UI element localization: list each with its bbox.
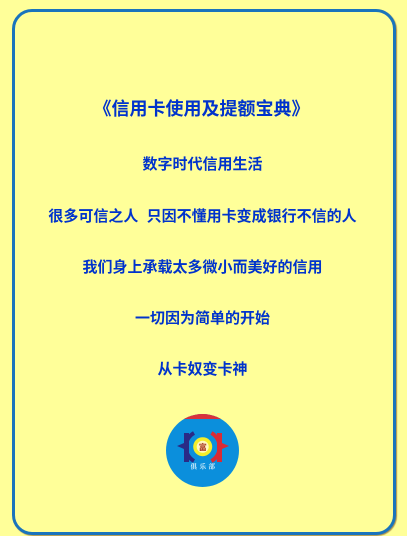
text line: from card slave to card master: 从卡奴变卡神 xyxy=(157,361,248,378)
title: 《信用卡使用及提额宝典》 xyxy=(94,99,310,119)
text line: simple start: 一切因为简单的开始 xyxy=(135,310,270,327)
icon: club logo: 俱乐部 xyxy=(190,462,218,470)
text line: trustworthy people: 很多可信之人 只因不懂用卡变成银行不信的人 xyxy=(48,208,357,225)
text line: digital era credit life: 数字时代信用生活 xyxy=(142,156,262,173)
text line: small beautiful credit: 我们身上承载太多微小而美好的信用 xyxy=(82,259,322,276)
icon: club logo: 富 xyxy=(199,442,207,453)
icon: club logo xyxy=(166,414,239,487)
